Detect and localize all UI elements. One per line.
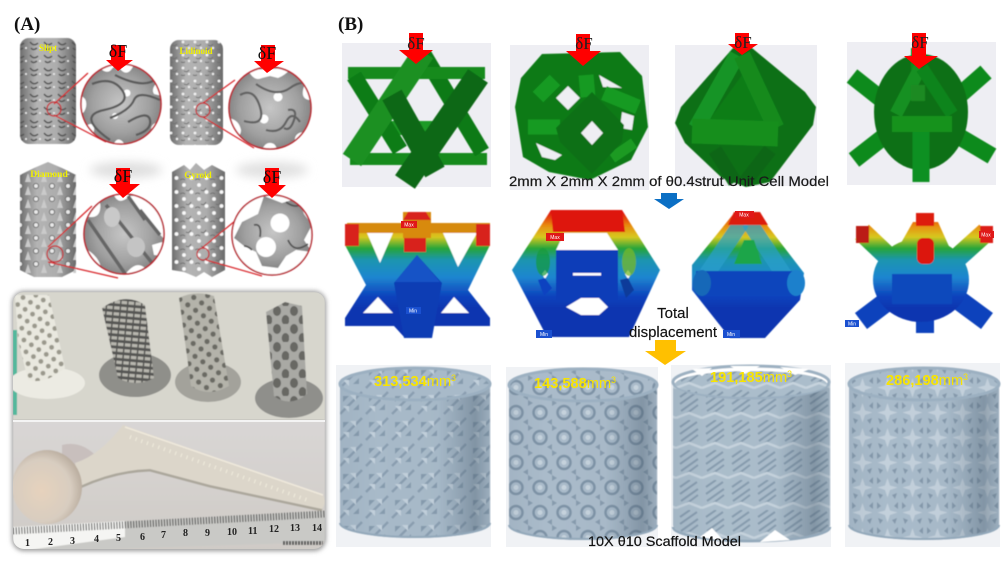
panel: TPMS scaffolds — [20, 38, 314, 278]
name: Lidinoid: Lidinoid — [179, 46, 213, 56]
arrow: force cell 4: δF — [911, 33, 929, 52]
arrow: orange down — [645, 340, 686, 365]
ruler numbers: 13 — [290, 523, 300, 534]
ruler numbers: 8 — [183, 528, 188, 539]
photo: printed scaffolds — [9, 292, 325, 420]
arrow: force 2: δF — [258, 43, 276, 63]
separator — [13, 420, 325, 422]
arrow: force 1 — [106, 41, 133, 71]
tag: Max 2: Max — [550, 235, 560, 241]
arrow: force 3 — [109, 166, 140, 198]
photos clipped — [9, 292, 325, 552]
ruler numbers: 1 — [25, 538, 30, 549]
tag: Min 1: Min — [409, 308, 417, 314]
ruler numbers: 11 — [248, 526, 257, 537]
ruler numbers: 7 — [161, 530, 166, 541]
caption: total displacement: Total — [657, 305, 689, 322]
ruler numbers: 6 — [140, 532, 145, 543]
ruler numbers: 9 — [205, 528, 210, 539]
photo shadow — [12, 291, 326, 551]
tag: Min 1 — [406, 307, 421, 314]
scaffold 3 — [671, 365, 831, 547]
arrow: force cell 3: δF — [734, 33, 752, 52]
volume 3: 3 — [787, 369, 792, 379]
caption: total displacement — [629, 305, 718, 341]
arrow: force 3: δF — [114, 166, 132, 186]
ruler numbers — [26, 524, 322, 546]
ruler numbers: 10 — [227, 527, 237, 538]
panel: unit cell models — [342, 33, 996, 190]
ruler numbers: 2 — [48, 537, 53, 548]
scaffold 4 — [845, 363, 1000, 547]
tag: Max 3: Max — [739, 212, 749, 218]
arrow: force cell 2: δF — [575, 34, 593, 53]
photo: femoral stem with ruler — [12, 421, 325, 552]
Slipt scaffold — [20, 38, 162, 150]
ruler numbers: 5 — [116, 533, 121, 544]
tag: Min 3 — [723, 330, 740, 338]
Diamond scaffold — [20, 162, 166, 278]
Gyroid scaffold — [172, 163, 314, 278]
FEA cell 4 — [856, 213, 993, 333]
arrow: force cell 1: δF — [407, 34, 425, 53]
FEA cell 3 — [692, 212, 805, 338]
panel: scaffold models — [336, 363, 1000, 547]
unit cell 3 — [675, 45, 817, 187]
arrow: blue down — [654, 193, 684, 209]
tag: Min 3: Min — [727, 332, 735, 338]
FEA cell 2 — [512, 210, 660, 337]
arrow: force 4 — [258, 167, 286, 198]
tag: Min 2: Min — [540, 332, 548, 338]
tag: Max 1 — [401, 221, 417, 228]
tag: Max 4: Max — [981, 232, 991, 238]
volume 2: 143,588mm — [534, 375, 612, 392]
volume 1: 3 — [451, 373, 456, 383]
ruler numbers: 12 — [269, 524, 279, 535]
tag: Max 1: Max — [404, 222, 414, 228]
volume 4: 286,198mm — [886, 372, 964, 389]
volume 1: 313,534mm — [374, 373, 452, 390]
halo behind lower arrows — [90, 162, 308, 178]
volume 3: 191,185mm — [710, 369, 788, 386]
panel: displacement results — [345, 210, 994, 338]
arrow: force cell 4 — [904, 33, 938, 69]
arrow: force 2 — [254, 43, 284, 73]
volume 2: 3 — [611, 375, 616, 385]
arrow: force cell 2 — [566, 34, 601, 66]
tag: Min 4: Min — [848, 322, 856, 328]
tag: Min 2 — [536, 330, 552, 338]
ruler numbers: 14 — [312, 523, 322, 534]
arrow: force cell 3 — [728, 33, 758, 55]
name: Diamond: Diamond — [30, 170, 68, 180]
unit cell 1 — [342, 43, 491, 187]
arrow: force 1: δF — [109, 41, 127, 61]
unit cell 2 — [510, 45, 649, 190]
caption: scaffold model: 10X θ10 Scaffold Model — [588, 533, 741, 549]
name: Slipt: Slipt — [39, 43, 57, 53]
panel: printed specimen photos — [9, 291, 326, 552]
volume 4: 3 — [963, 372, 968, 382]
scaffold 2 — [506, 367, 658, 547]
tag: Max 3 — [735, 211, 754, 218]
Lidinoid scaffold — [170, 40, 313, 156]
tag: Max 4 — [979, 231, 994, 238]
panel label A: (A) — [14, 14, 40, 35]
panel label B: (B) — [338, 14, 363, 35]
caption: unit cell model: 2mm X 2mm X 2mm of θ0.4strut Unit Cell Model — [509, 173, 829, 189]
ruler numbers: 4 — [94, 534, 99, 545]
arrow: force cell 1 — [399, 33, 433, 64]
name: Gyroid: Gyroid — [184, 170, 212, 180]
caption: total displacement: displacement — [629, 324, 718, 341]
scaffold 1 — [336, 365, 491, 547]
FEA cell 1 — [345, 212, 490, 338]
unit cell 4 — [847, 42, 996, 185]
ruler numbers: 3 — [70, 536, 75, 547]
tag: Max 2 — [546, 233, 564, 241]
arrow: force 4: δF — [263, 167, 281, 187]
tag: Min 4 — [845, 320, 859, 328]
